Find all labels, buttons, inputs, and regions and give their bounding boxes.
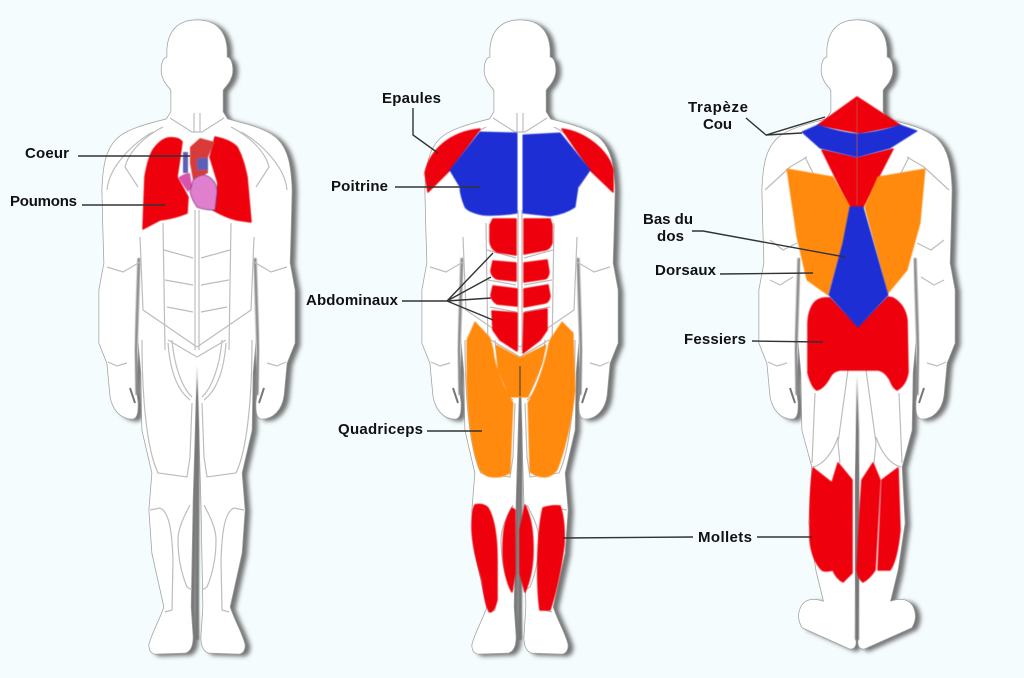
center line between legs [519,366,521,396]
figure 2: front view muscles [423,21,617,653]
body silhouette front [423,21,617,653]
quadriceps [467,322,575,477]
bas du dos: lower back [829,207,888,327]
label: Abdominaux: Abdominaux [306,292,399,309]
epaules: shoulders [425,129,613,192]
abdominaux: abdominal muscles [490,219,552,353]
body silhouette front [100,21,294,653]
label: Bas du dos: Bas du [643,211,693,228]
figure 3: back view muscles [760,21,954,648]
fessiers: glutes [808,297,908,390]
mollets: back calves [810,463,900,582]
cou: blue band [802,125,917,157]
figure 1: front view with heart and lungs [100,21,294,653]
label: Bas du dos: dos [657,228,684,245]
label: Cou: Cou [703,116,732,133]
label: Poumons: Poumons [10,193,77,210]
label: Fessiers: Fessiers [684,331,746,348]
trapeze: upper and lower red [818,97,900,207]
mollets: calves [472,504,564,612]
label: Trapeze: Trapèze [688,99,748,116]
heart [178,138,217,210]
lungs [143,137,251,229]
label: Bas du dos [643,211,693,245]
label: Dorsaux: Dorsaux [655,262,717,279]
spine line over back muscles [856,100,858,205]
label: Mollets: Mollets [698,529,752,546]
dorsaux: orange back muscles [787,169,925,295]
label: Epaules: Epaules [382,90,441,107]
body silhouette back [760,21,954,648]
label: Poitrine: Poitrine [331,178,388,195]
poitrine: chest [450,132,590,216]
label: Quadriceps: Quadriceps [338,421,423,438]
leader lines [78,108,845,538]
label: Coeur: Coeur [25,145,69,162]
